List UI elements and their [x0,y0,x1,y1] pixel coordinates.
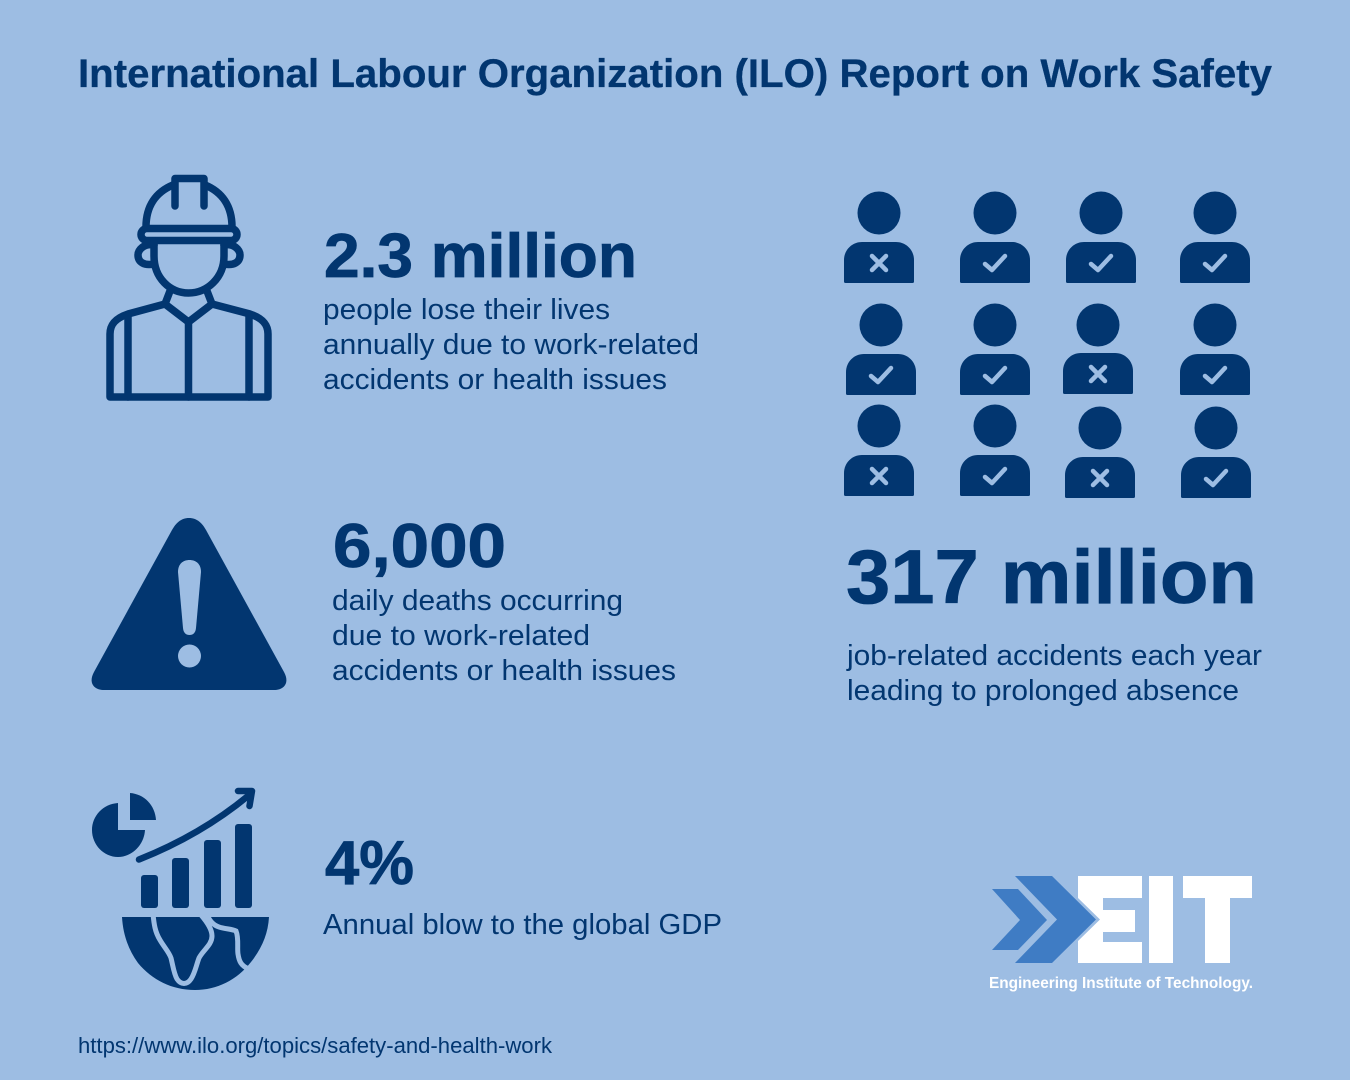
description: 2.3 million: accidents or health issues [323,364,667,396]
logo letters [1078,876,1252,963]
stat: 6,000: 6,000 [333,512,506,581]
source url: https://www.ilo.org/topics/safety-and-health-work [78,1033,553,1058]
panel: 4% GDP [92,791,722,990]
description: 317 million: job-related accidents each year [846,640,1262,672]
logo: EIT [989,876,1253,992]
icon grid: workers with marks [844,192,1251,498]
icon: chart and globe [92,791,269,990]
description: 2.3 million [323,294,699,396]
description: 6,000: accidents or health issues [332,655,676,687]
icon: chevrons [992,876,1096,963]
icon: construction worker [110,178,268,397]
logo tagline: Engineering Institute of Technology. [989,975,1253,992]
description: 4%: Annual blow to the global GDP [323,909,722,941]
description: 2.3 million: people lose their lives [323,294,610,326]
stat: 2.3 million: 2.3 million [324,222,637,291]
description: 6,000: daily deaths occurring [332,585,623,617]
panel: 317 million accidents [844,192,1262,707]
description: 2.3 million: annually due to work-related [323,329,699,361]
icon: warning triangle [92,518,286,690]
panel: 2.3 million deaths [110,178,699,397]
description: 6,000 [332,585,676,687]
description: 317 million: leading to prolonged absence [847,675,1239,707]
description: 317 million [846,640,1262,707]
panel: 6,000 daily deaths [92,512,676,690]
stat: 317 million: 317 million [846,535,1257,620]
title: International Labour Organization (ILO) Report on Work Safety [78,52,1273,96]
description: 6,000: due to work-related [332,620,590,652]
stat: 4%: 4% [325,829,414,898]
